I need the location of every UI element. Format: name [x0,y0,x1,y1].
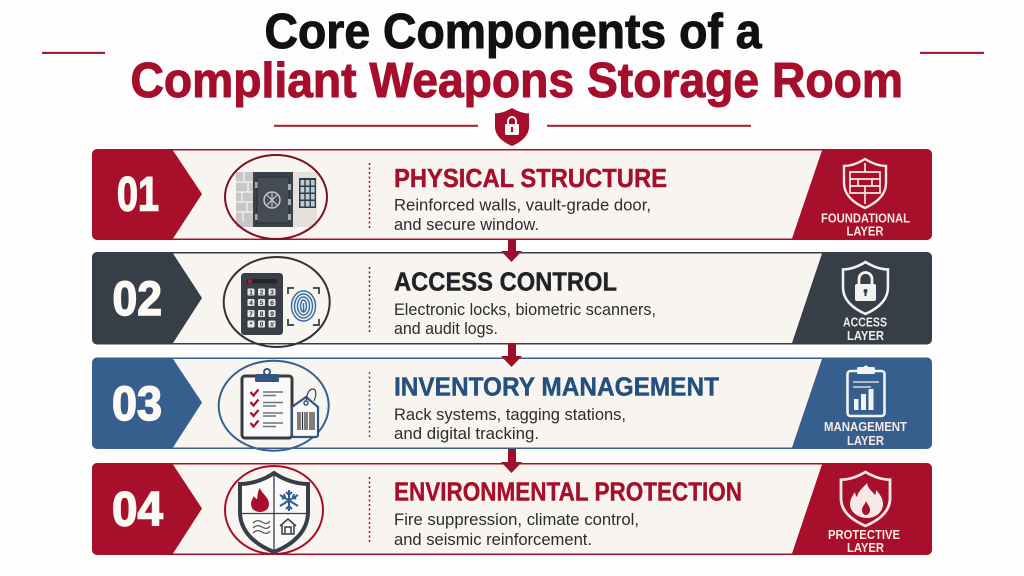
panel: inventory management [92,358,932,451]
description: and digital tracking. [394,425,539,443]
number 04: 04 [112,484,163,536]
icon: header shield lock [495,108,529,146]
layer label: FOUNDATIONAL [821,212,910,226]
layer label [828,528,900,555]
heading: PHYSICAL STRUCTURE [394,165,667,193]
icon: keypad and fingerprint [224,257,330,347]
description: and audit logs. [394,320,498,338]
icon: keypad and fingerprint: 3 [270,290,274,296]
number 02: 02 [112,273,162,326]
description: Electronic locks, biometric scanners, [394,301,656,319]
icon: keypad and fingerprint: 1 [249,290,253,296]
description: and secure window. [394,216,539,234]
number 03: 03 [112,378,162,431]
description: Rack systems, tagging stations, [394,406,626,424]
dotted divider [368,267,370,333]
dotted divider [368,372,370,438]
icon: keypad and fingerprint: 2 [260,290,264,296]
layer label [824,420,907,448]
icon: shield with fire, snow, wind and house [225,466,323,554]
icon: shield with padlock [843,262,888,314]
heading: ACCESS CONTROL [394,268,617,296]
icon: keypad and fingerprint: # [270,322,274,328]
layer label: LAYER [846,224,884,238]
description: Reinforced walls, vault-grade door, [394,196,651,214]
layer label: ACCESS [843,316,887,330]
icon: keypad and fingerprint: 8 [260,311,264,318]
layer label [843,316,887,343]
icon: clipboard with bar chart [848,366,884,416]
icon: shield with flame [841,472,890,526]
heading: ENVIRONMENTAL PROTECTION [394,478,742,506]
arrow: 03 to 04 [501,449,522,473]
description: and seismic reinforcement. [394,531,592,549]
icon: keypad and fingerprint: 9 [270,311,274,318]
heading: INVENTORY MANAGEMENT [394,374,719,402]
icon: keypad and fingerprint: 4 [249,300,253,307]
title: Compliant Weapons Storage Room [130,54,903,108]
icon: keypad and fingerprint: * [250,322,253,328]
description [394,511,639,549]
icon: keypad and fingerprint: 5 [260,300,264,307]
number 01: 01 [117,168,159,222]
icon: keypad and fingerprint: 7 [249,311,253,318]
description: Fire suppression, climate control, [394,511,639,529]
layer label: LAYER [847,434,884,448]
arrow: 01 to 02 [501,240,522,262]
layer label [821,212,910,238]
description [394,301,656,338]
description [394,406,626,443]
icon: clipboard and barcode tag [219,361,329,451]
icon: shield with bricks [844,159,886,208]
layer label: LAYER [847,329,884,343]
layer label: MANAGEMENT [824,420,907,434]
dotted divider [368,163,370,228]
layer label: LAYER [847,541,884,555]
title: Core Components of a [264,5,762,59]
arrow: 02 to 03 [501,344,522,367]
header rules [42,52,984,127]
description [394,196,651,234]
layer label: PROTECTIVE [828,528,900,542]
title [130,5,903,108]
icon: keypad and fingerprint: 6 [270,300,274,307]
panel: access control [92,252,932,347]
panel: environmental protection [92,463,932,555]
dotted divider [368,477,370,543]
icon: vault door, wall and window [225,155,327,239]
panel: physical structure [92,149,932,240]
icon: keypad and fingerprint: 0 [260,322,264,328]
